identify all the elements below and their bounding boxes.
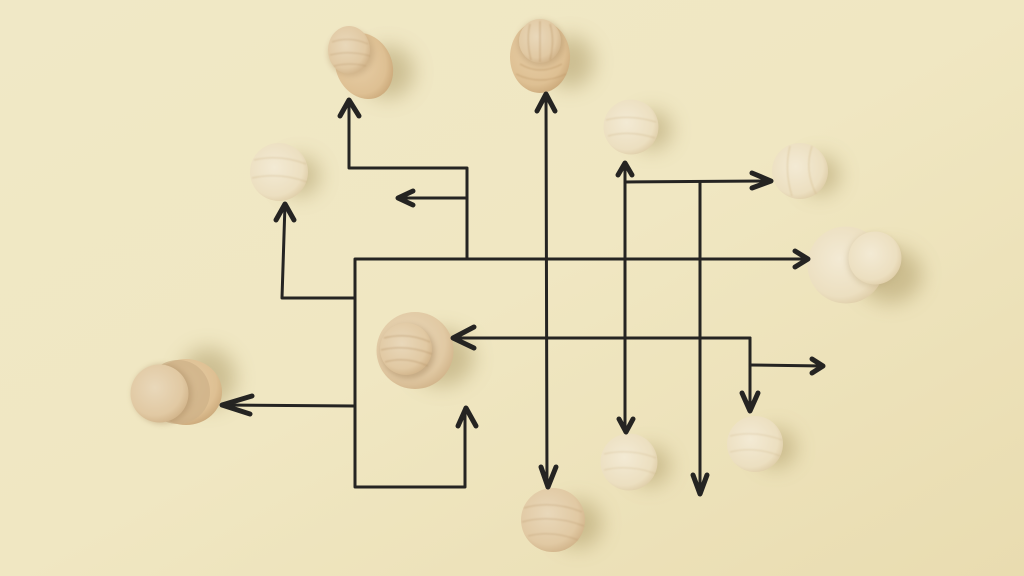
arrow: branch up to top left peg: [340, 100, 467, 258]
arrow: left to central peg with down branch: [453, 327, 758, 411]
peg: top left double: [324, 23, 404, 109]
peg: upper left: [250, 143, 308, 201]
peg: upper middle right: [604, 100, 658, 154]
arrows: [222, 94, 823, 494]
arrow: right to upper right peg: [625, 173, 771, 188]
peg: central double: [376, 312, 454, 389]
arrow: main line right with loop to centre peg: [355, 251, 808, 487]
peg: right double: [808, 226, 902, 304]
arrow: vertical double-headed centre: [537, 94, 556, 487]
peg: top centre: [510, 19, 570, 93]
arrow: up to upper left peg: [276, 204, 355, 298]
peg: left double: [130, 359, 222, 425]
peg: bottom centre: [521, 488, 585, 552]
arrow: long vertical down: [693, 182, 707, 494]
arrow: short left branch: [398, 191, 467, 205]
arrow: left to left peg: [222, 396, 355, 414]
peg: lower right: [727, 416, 783, 472]
peg shadows: [180, 36, 922, 548]
peg: upper right: [772, 143, 828, 199]
arrow: short right branch: [750, 359, 823, 373]
peg: lower middle: [600, 434, 658, 490]
arrow: vertical double-headed right: [618, 163, 633, 432]
